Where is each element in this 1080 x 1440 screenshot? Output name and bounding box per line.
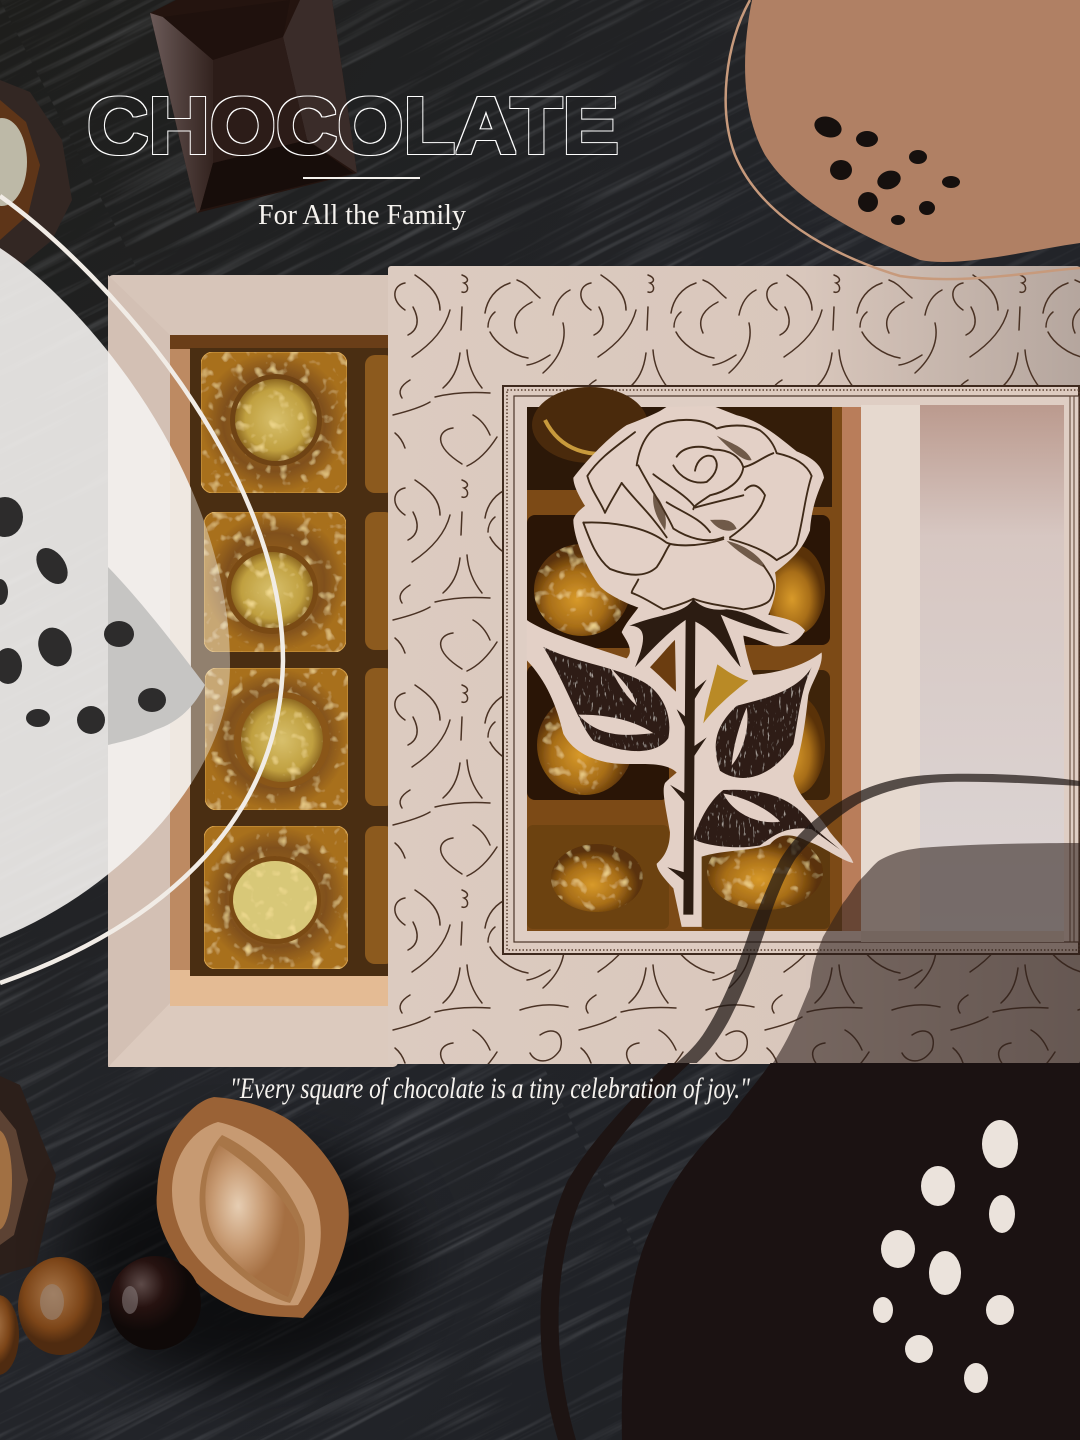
left leaf	[543, 647, 669, 751]
curved dark line lower	[540, 1063, 690, 1440]
petal outlines	[583, 420, 812, 609]
tray cell row 4	[204, 826, 395, 969]
white blob left	[0, 248, 230, 938]
box lid	[388, 266, 1080, 1064]
object shadow	[70, 1140, 410, 1380]
brown candy	[18, 1257, 102, 1355]
rose card	[527, 406, 853, 927]
window chocolates	[527, 387, 832, 929]
subtitle: For All the Family	[258, 200, 466, 231]
box tray	[108, 275, 398, 1067]
white curved line left	[0, 196, 283, 983]
tray cell row 3	[205, 668, 395, 810]
stem and calyx	[629, 599, 790, 915]
white dots on dark blob	[873, 1120, 1018, 1393]
petal shading	[653, 436, 767, 569]
dark blob bottom right	[622, 1056, 1080, 1440]
stem gap right	[703, 664, 748, 723]
black dots on white blob	[0, 497, 166, 734]
tan blob top right	[745, 0, 1080, 262]
black dots on tan blob	[811, 113, 960, 225]
title: CHOCOLATE	[87, 81, 619, 170]
lid window	[503, 386, 1079, 954]
chocolate piece top	[150, 0, 357, 213]
tan outline curve	[726, 0, 1080, 279]
tray cell row 1	[201, 352, 395, 493]
tray cell row 2	[204, 512, 395, 652]
stem gap left	[650, 640, 676, 692]
dark blob over lid	[768, 843, 1080, 1070]
card cut-out	[527, 406, 853, 927]
candy edge	[0, 1295, 19, 1375]
curved line over lid	[668, 774, 1080, 1070]
right leaves	[693, 667, 840, 850]
almond chocolate	[157, 1097, 349, 1318]
hex chocolate bottom left	[0, 1076, 56, 1275]
title divider	[303, 177, 420, 179]
quote: "Every square of chocolate is a tiny celebration of joy."	[230, 1072, 750, 1105]
chocolate piece top left	[0, 80, 72, 265]
dark candy	[109, 1256, 201, 1350]
